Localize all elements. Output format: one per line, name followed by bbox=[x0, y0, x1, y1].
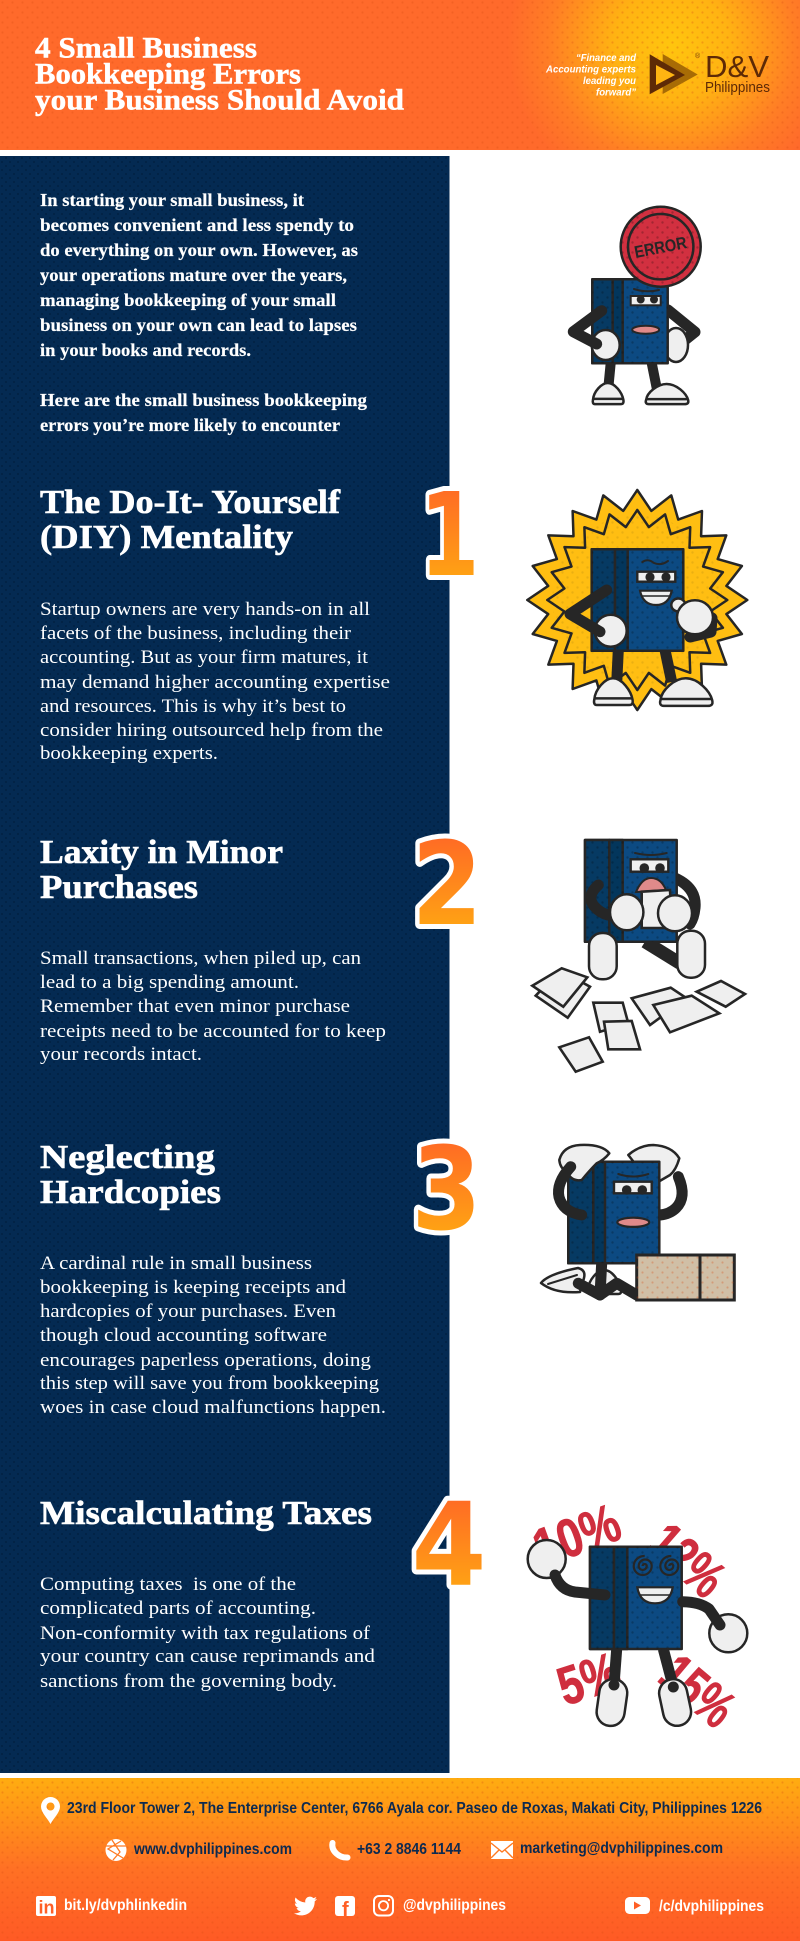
section 4 body: Non-conformity with tax regulations of bbox=[40, 1623, 371, 1644]
title: Bookkeeping Errors bbox=[35, 58, 301, 90]
section 3 body: A cardinal rule in small business bbox=[40, 1253, 312, 1274]
tagline: leading you bbox=[583, 76, 636, 87]
tagline: Accounting experts bbox=[545, 64, 636, 76]
section 1 heading: The Do-It- Yourself bbox=[40, 484, 341, 521]
intro text: in your books and records. bbox=[40, 340, 251, 360]
title bbox=[35, 32, 404, 116]
intro text: managing bookkeeping of your small bbox=[40, 290, 336, 310]
section 4 body: sanctions from the governing body. bbox=[40, 1671, 337, 1692]
YouTube channel: /c/dvphilippines bbox=[659, 1898, 764, 1915]
icon: location pin bbox=[41, 1797, 60, 1824]
section 1 body: may demand higher accounting expertise bbox=[40, 672, 390, 693]
section 4 heading: Miscalculating Taxes bbox=[40, 1495, 372, 1532]
section 4 body: Computing taxes is one of the bbox=[40, 1574, 296, 1595]
intro text bbox=[40, 190, 367, 435]
section 4 body bbox=[40, 1574, 376, 1692]
section 1 body: Startup owners are very hands-on in all bbox=[40, 599, 370, 620]
intro text: do everything on your own. However, as bbox=[40, 240, 358, 260]
section 1 heading bbox=[40, 484, 341, 556]
icon: book mascot holding ERROR sign: ERROR bbox=[633, 233, 688, 262]
section 1 body: bookkeeping experts. bbox=[40, 743, 218, 764]
number 3: 3 bbox=[412, 1123, 482, 1257]
phone number: +63 2 8846 1144 bbox=[357, 1841, 461, 1858]
intro text: your operations mature over the years, bbox=[40, 265, 347, 285]
section 1 body bbox=[40, 599, 390, 764]
icon: envelope bbox=[491, 1841, 513, 1859]
section 2 body: Small transactions, when piled up, can bbox=[40, 948, 362, 969]
section 2 body: your records intact. bbox=[40, 1044, 202, 1065]
section 2 body bbox=[40, 948, 386, 1065]
number 1: 1 bbox=[420, 469, 480, 603]
icon: mascot on yellow starburst bbox=[527, 490, 747, 710]
section 4 body: your country can cause reprimands and bbox=[40, 1646, 376, 1667]
email: marketing@dvphilippines.com bbox=[520, 1840, 723, 1857]
icon: dizzy mascot with tax percentages: 12% bbox=[637, 1512, 737, 1610]
section 3 heading: Hardcopies bbox=[40, 1174, 221, 1211]
section 2 body: lead to a big spending amount. bbox=[40, 972, 299, 993]
icon: Twitter bbox=[294, 1897, 317, 1915]
section 3 body: though cloud accounting software bbox=[40, 1325, 327, 1346]
section 3 body: encourages paperless operations, doing bbox=[40, 1350, 372, 1371]
icon: phone bbox=[332, 1843, 348, 1858]
LinkedIn link: bit.ly/dvphlinkedin bbox=[64, 1897, 187, 1914]
icon: Instagram bbox=[374, 1896, 393, 1916]
section 1 body: facets of the business, including their bbox=[40, 623, 352, 644]
icon: book mascot holding ERROR sign bbox=[573, 207, 701, 404]
tagline: “Finance and bbox=[576, 53, 637, 64]
icon: Facebook: f bbox=[342, 1899, 349, 1921]
intro text: In starting your small business, it bbox=[40, 190, 304, 210]
tagline bbox=[545, 53, 637, 98]
section 4 body: complicated parts of accounting. bbox=[40, 1598, 316, 1619]
section 3 body: this step will save you from bookkeeping bbox=[40, 1373, 380, 1394]
website: www.dvphilippines.com bbox=[133, 1841, 292, 1858]
icon: LinkedIn: in bbox=[38, 1898, 54, 1918]
icon: YouTube bbox=[625, 1897, 650, 1914]
title: your Business Should Avoid bbox=[35, 84, 404, 116]
section 3 body bbox=[40, 1253, 386, 1418]
section 1 body: accounting. But as your firm matures, it bbox=[40, 647, 369, 668]
icon: mascot dropping receipts bbox=[532, 840, 745, 1072]
icon: stressed mascot with box bbox=[541, 1145, 734, 1300]
section 3 heading bbox=[40, 1139, 221, 1211]
section 2 body: receipts need to be accounted for to keep bbox=[40, 1021, 386, 1042]
section 3 body: bookkeeping is keeping receipts and bbox=[40, 1277, 347, 1298]
icon: globe bbox=[106, 1839, 126, 1861]
icon: dizzy mascot with tax percentages bbox=[525, 1492, 747, 1739]
Instagram handle: @dvphilippines bbox=[403, 1897, 506, 1914]
section 2 heading bbox=[40, 834, 283, 906]
logo: D&V Philippines: D&V bbox=[705, 49, 769, 84]
tagline: forward” bbox=[596, 88, 636, 98]
section 2 heading: Purchases bbox=[40, 869, 198, 906]
icon: dizzy mascot with tax percentages: 5% bbox=[550, 1641, 628, 1717]
logo: D&V Philippines: ® bbox=[695, 52, 701, 60]
section 2 heading: Laxity in Minor bbox=[40, 834, 283, 871]
intro text: errors you’re more likely to encounter bbox=[40, 415, 340, 435]
icon: dizzy mascot with tax percentages: 15% bbox=[648, 1643, 747, 1739]
section 3 body: hardcopies of your purchases. Even bbox=[40, 1301, 337, 1322]
section 1 body: consider hiring outsourced help from the bbox=[40, 720, 383, 741]
section 1 heading: (DIY) Mentality bbox=[40, 519, 293, 556]
section 3 heading: Neglecting bbox=[40, 1139, 215, 1176]
section 1 body: and resources. This is why it’s best to bbox=[40, 696, 346, 717]
section 2 body: Remember that even minor purchase bbox=[40, 996, 350, 1017]
number 2: 2 bbox=[412, 818, 482, 952]
logo: D&V Philippines: Philippines bbox=[705, 80, 770, 96]
header banner bbox=[0, 0, 800, 150]
section 3 body: woes in case cloud malfunctions happen. bbox=[40, 1397, 386, 1418]
intro text: business on your own can lead to lapses bbox=[40, 315, 357, 335]
number 4: 4 bbox=[412, 1479, 486, 1613]
icon: Facebook bbox=[335, 1896, 355, 1921]
logo: D&V Philippines bbox=[650, 49, 770, 96]
footer band bbox=[0, 1778, 800, 1941]
icon: dizzy mascot with tax percentages: 10% bbox=[525, 1492, 628, 1579]
title: 4 Small Business bbox=[35, 32, 257, 64]
intro text: becomes convenient and less spendy to bbox=[40, 215, 354, 235]
intro text: Here are the small business bookkeeping bbox=[40, 390, 367, 410]
navy content panel bbox=[0, 156, 450, 1773]
